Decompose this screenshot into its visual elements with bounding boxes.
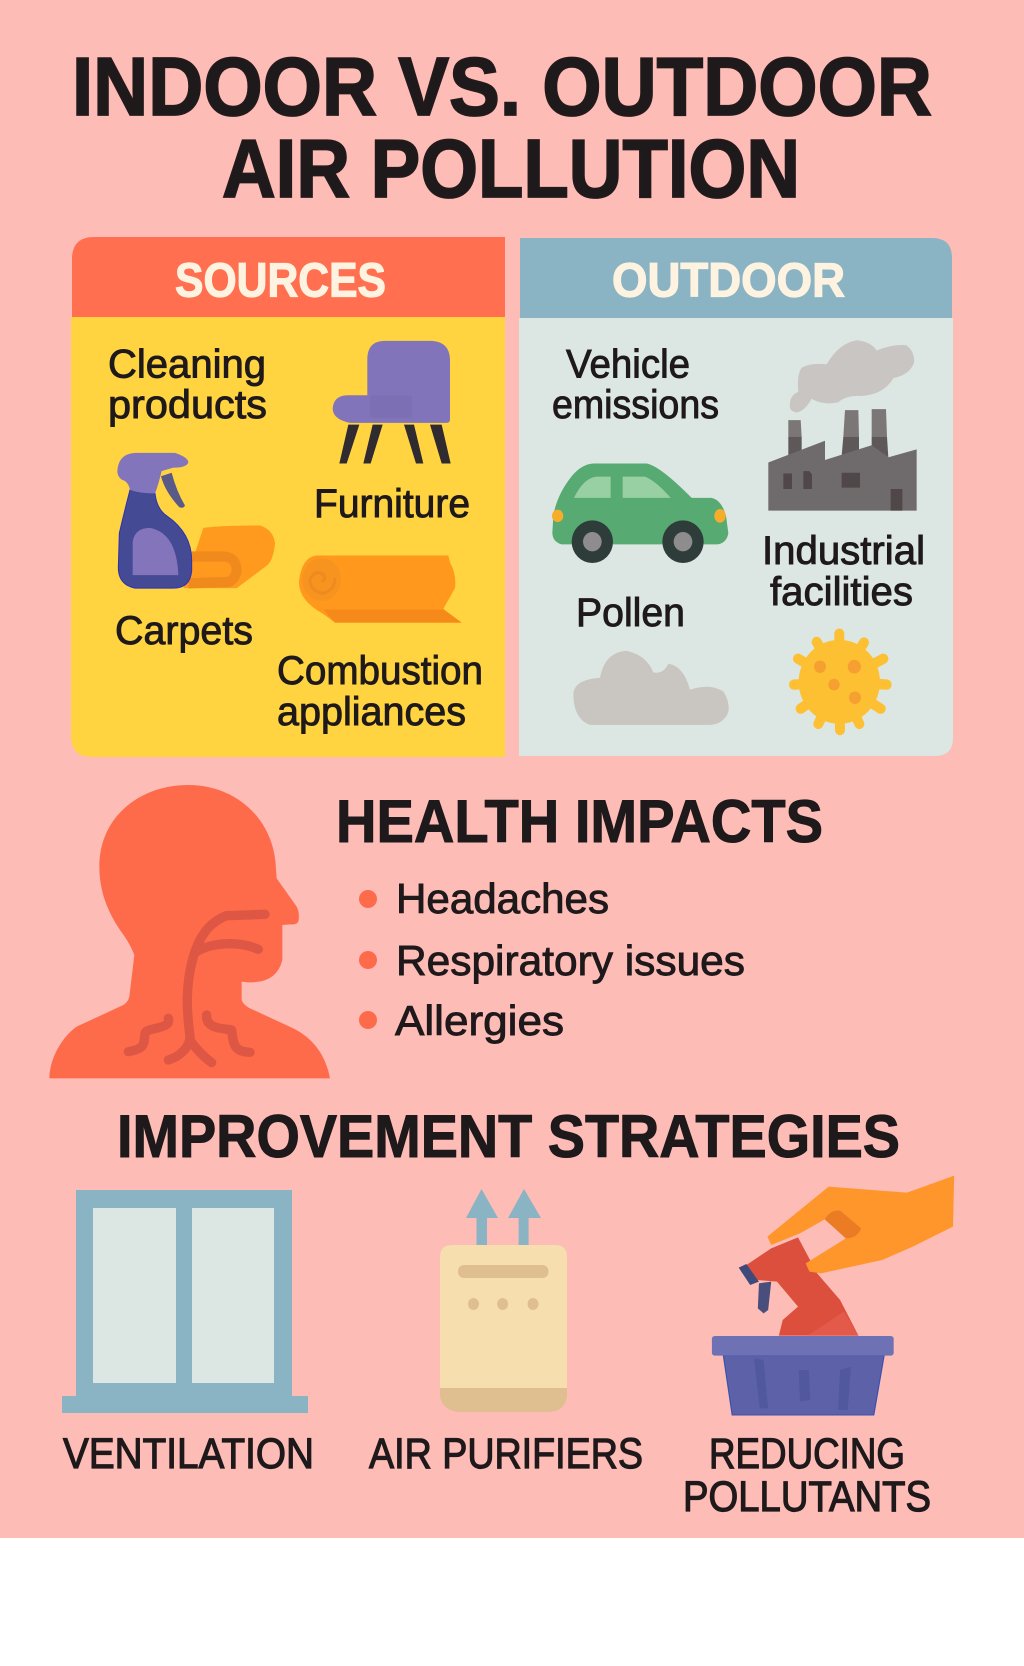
- label: combustion appliances: [277, 649, 483, 734]
- outdoor panel header: [520, 238, 952, 318]
- label: reducing pollutants: [683, 1430, 931, 1521]
- icon: factory: [768, 409, 917, 511]
- icon: car: [552, 463, 728, 563]
- label: pollen: Pollen: [576, 591, 685, 635]
- title: [72, 40, 932, 215]
- bullet: allergies: Allergies: [395, 997, 564, 1044]
- icon: cloud: [573, 651, 729, 725]
- label: vehicle emissions: Vehicle: [566, 342, 690, 386]
- label: vehicle emissions: emissions: [552, 383, 719, 427]
- outdoor panel body: [519, 318, 953, 756]
- icon: rolled carpet: [299, 555, 462, 623]
- icon: head with airways: [49, 785, 330, 1078]
- heading: improvement strategies: IMPROVEMENT STRATEGIES: [117, 1103, 900, 1170]
- strategy: reducing pollutants: [683, 1176, 954, 1521]
- heading: outdoor: OUTDOOR: [612, 254, 845, 308]
- label: cleaning products: products: [108, 383, 267, 427]
- icon: small carpet roll: [183, 525, 275, 588]
- strategy: air purifiers: [369, 1189, 643, 1478]
- sources panel header: [72, 237, 505, 317]
- label: reducing pollutants: POLLUTANTS: [683, 1473, 931, 1521]
- label: industrial facilities: facilities: [770, 570, 913, 614]
- label: cleaning products: [108, 342, 267, 427]
- panel: outdoor: [519, 238, 953, 756]
- strategy: ventilation: [62, 1190, 314, 1478]
- icon: smoke: [790, 340, 914, 413]
- bullet: respiratory issues: Respiratory issues: [396, 937, 745, 984]
- icon: air purifier: [440, 1245, 567, 1412]
- heading: sources: SOURCES: [175, 254, 386, 308]
- label: industrial facilities: Industrial: [762, 529, 925, 573]
- label: cleaning products: Cleaning: [108, 342, 266, 386]
- label: reducing pollutants: REDUCING: [709, 1430, 905, 1478]
- bullet: headaches: Headaches: [396, 875, 609, 922]
- label: furniture: Furniture: [314, 482, 470, 526]
- label: carpets: Carpets: [115, 609, 253, 653]
- icon: hand holding spray into basket: [712, 1176, 954, 1415]
- icon: pollen grain: [794, 634, 887, 730]
- list: health impacts: [359, 875, 745, 1044]
- heading: health impacts: HEALTH IMPACTS: [336, 788, 823, 855]
- label: ventilation: VENTILATION: [63, 1430, 314, 1478]
- label: industrial facilities: [762, 529, 925, 614]
- label: combustion appliances: appliances: [277, 690, 466, 734]
- title: INDOOR VS. OUTDOOR: [72, 40, 932, 133]
- title: AIR POLLUTION: [222, 122, 800, 215]
- sources panel body: [71, 317, 505, 757]
- icon: spray bottle: [117, 453, 192, 588]
- label: combustion appliances: Combustion: [277, 649, 483, 693]
- icon: window: [62, 1190, 308, 1413]
- icon: chair: [333, 341, 451, 463]
- label: vehicle emissions: [552, 342, 719, 427]
- icon: arrows up: [466, 1189, 541, 1245]
- label: air purifiers: AIR PURIFIERS: [369, 1430, 643, 1478]
- panel: sources: [71, 237, 505, 757]
